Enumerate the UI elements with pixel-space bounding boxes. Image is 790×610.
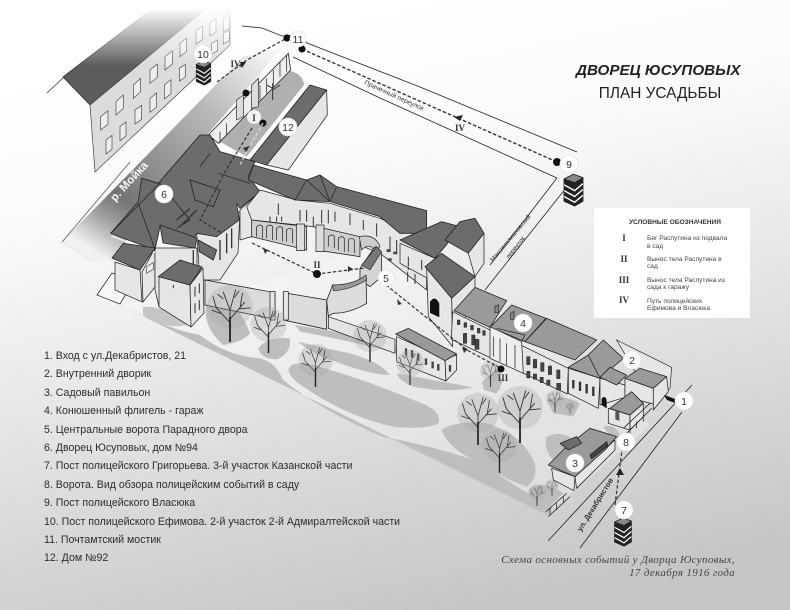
caption: 17 декабря 1916 года (629, 567, 735, 579)
numbered markers: 8 (623, 437, 629, 449)
palace long wing (247, 165, 427, 290)
numbered list: 3. Садовый павильон (44, 387, 150, 399)
numbered markers: 3 (572, 458, 578, 470)
panel: legend: Вынос тела Распутина в (647, 256, 722, 263)
garden (120, 235, 650, 515)
numbered list: 1. Вход с ул.Декабристов, 21 (44, 350, 186, 362)
arrow to entrance 1 (664, 395, 675, 403)
numbered list: 11. Почтамтский мостик (44, 534, 161, 546)
panel: legend: Ефимова и Власюка (647, 305, 710, 312)
building 12 and forecourt (208, 53, 327, 170)
panel: legend: в сад (647, 243, 663, 250)
numbered markers (155, 31, 693, 519)
title: ДВОРЕЦ ЮСУПОВЫХ (574, 62, 741, 79)
route IV: police path: IV (455, 123, 465, 133)
numbered markers: 6 (161, 189, 167, 201)
street: Maximilian lane: переулок (505, 235, 527, 260)
garden pavilion 3 (546, 428, 617, 517)
street: Dekabristov (548, 385, 692, 548)
route 7 to 8 (615, 450, 624, 505)
panel: legend: I (622, 233, 626, 243)
entrance buildings (568, 340, 672, 433)
numbered markers: 10 (197, 49, 209, 61)
numbered list: 7. Пост полицейского Григорьева. 3-й участок Казанской части (44, 460, 352, 472)
numbered list: 8. Ворота. Вид обзора полицейским событий в саду (44, 479, 300, 491)
numbered markers: 9 (566, 159, 572, 171)
panel: legend: Вынос тела Распутина из (647, 277, 725, 284)
numbered list: 2. Внутренний дворик (44, 368, 151, 380)
panel: legend: Путь полицейских (647, 297, 703, 305)
stable wing (451, 287, 597, 394)
title: ПЛАН УСАДЬБЫ (599, 85, 721, 102)
panel: legend: IV (619, 295, 629, 305)
route I: Rasputin's run (200, 90, 266, 233)
numbered markers: 4 (520, 318, 526, 330)
panel: legend: Бег Распутина из подвала (647, 235, 728, 242)
panel: legend: II (620, 254, 628, 264)
building opposite the river (40, 0, 240, 172)
street: Prachechny lane (242, 26, 577, 178)
numbered list: 5. Центральные ворота Парадного двора (44, 424, 248, 436)
trees (207, 285, 575, 506)
panel: legend: УСЛОВНЫЕ ОБОЗНАЧЕНИЯ (629, 219, 721, 226)
panel: legend: сад (647, 263, 658, 270)
numbered markers: 7 (621, 505, 627, 517)
route IV: police path: IV. (230, 59, 242, 69)
caption: Схема основных событий у Дворца Юсуповых, (501, 554, 735, 566)
numbered list: 6. Дворец Юсуповых, дом №94 (44, 442, 198, 454)
numbered list: 4. Конюшенный флигель - гараж (44, 405, 204, 417)
route I: Rasputin's run: I (252, 113, 256, 123)
panel: legend (594, 208, 750, 318)
panel: legend: III (619, 275, 630, 285)
title (574, 62, 741, 102)
guard posts (196, 61, 631, 546)
route III: carrying the body to the garage: III (498, 373, 509, 383)
palace gate block (400, 218, 484, 347)
street: Prachechny lane: Прачечный переулок (363, 79, 425, 113)
numbered markers: 5 (383, 273, 389, 285)
river Moika (62, 47, 283, 262)
numbered list: 12. Дом №92 (44, 552, 108, 564)
street: Maximilian lane: Максимилиановский (489, 213, 533, 263)
courtyard arcades and curved gate (252, 220, 382, 287)
garden walls (205, 275, 395, 353)
route III: carrying the body to the garage (386, 285, 509, 383)
numbered markers: 11 (293, 34, 304, 46)
numbered list: 10. Пост полицейского Ефимова. 2-й участок 2-й Адмиралтейской части (44, 516, 400, 528)
street: Maximilian lane (485, 178, 566, 290)
route IV: police path (217, 34, 561, 166)
numbered markers: 12 (282, 122, 294, 134)
street: Dekabristov: ул. Декабристов (575, 476, 615, 533)
numbered markers: 1 (681, 396, 687, 408)
numbered list (44, 350, 400, 564)
garden pavilion carriage house (396, 328, 457, 381)
river Moika: р. Мойка (108, 159, 151, 204)
numbered markers: 2 (629, 355, 635, 367)
route II: carrying the body to the garden (252, 243, 365, 278)
caption (501, 554, 735, 579)
numbered list: 9. Пост полицейского Власюка (44, 497, 195, 509)
panel: legend: сада к гаражу (647, 284, 690, 291)
palace main block (97, 135, 260, 327)
route II: carrying the body to the garden: II (313, 260, 321, 270)
